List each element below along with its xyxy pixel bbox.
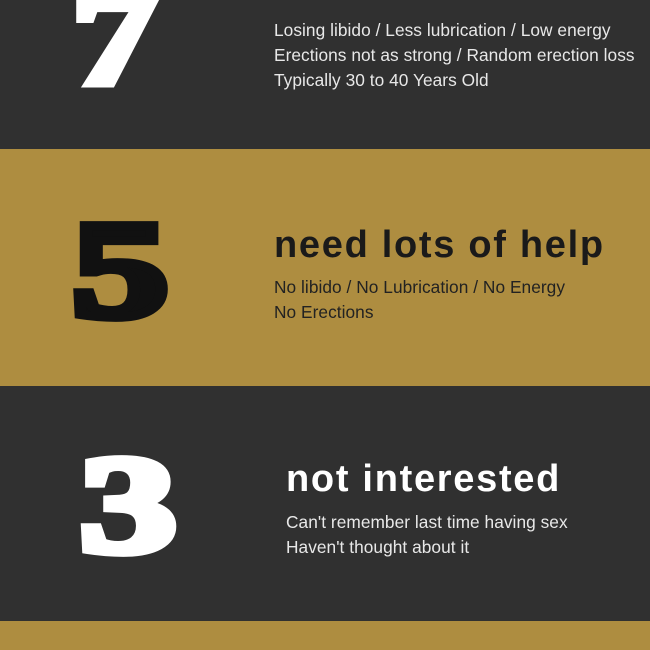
panel: level 5 bbox=[0, 149, 650, 386]
panel: level 7 bbox=[0, 0, 650, 149]
text block 5: No Erections bbox=[274, 302, 374, 322]
text block 7: Losing libido / Less lubrication / Low energy bbox=[274, 20, 611, 40]
panel: bottom gold band bbox=[0, 621, 650, 650]
text block 5 bbox=[274, 277, 565, 322]
text block 3: Haven't thought about it bbox=[286, 537, 469, 557]
number 3: 3 bbox=[80, 428, 177, 581]
text block 5: No libido / No Lubrication / No Energy bbox=[274, 277, 565, 297]
heading 3: not interested bbox=[286, 458, 561, 500]
text block 3 bbox=[286, 512, 568, 557]
panel: level 3 bbox=[0, 386, 650, 621]
heading 5: need lots of help bbox=[274, 224, 605, 266]
number 5: 5 bbox=[72, 193, 169, 346]
text block 3: Can't remember last time having sex bbox=[286, 512, 568, 532]
text block 7 bbox=[274, 20, 635, 90]
text block 7: Erections not as strong / Random erection loss bbox=[274, 45, 635, 65]
text block 7: Typically 30 to 40 Years Old bbox=[274, 70, 489, 90]
